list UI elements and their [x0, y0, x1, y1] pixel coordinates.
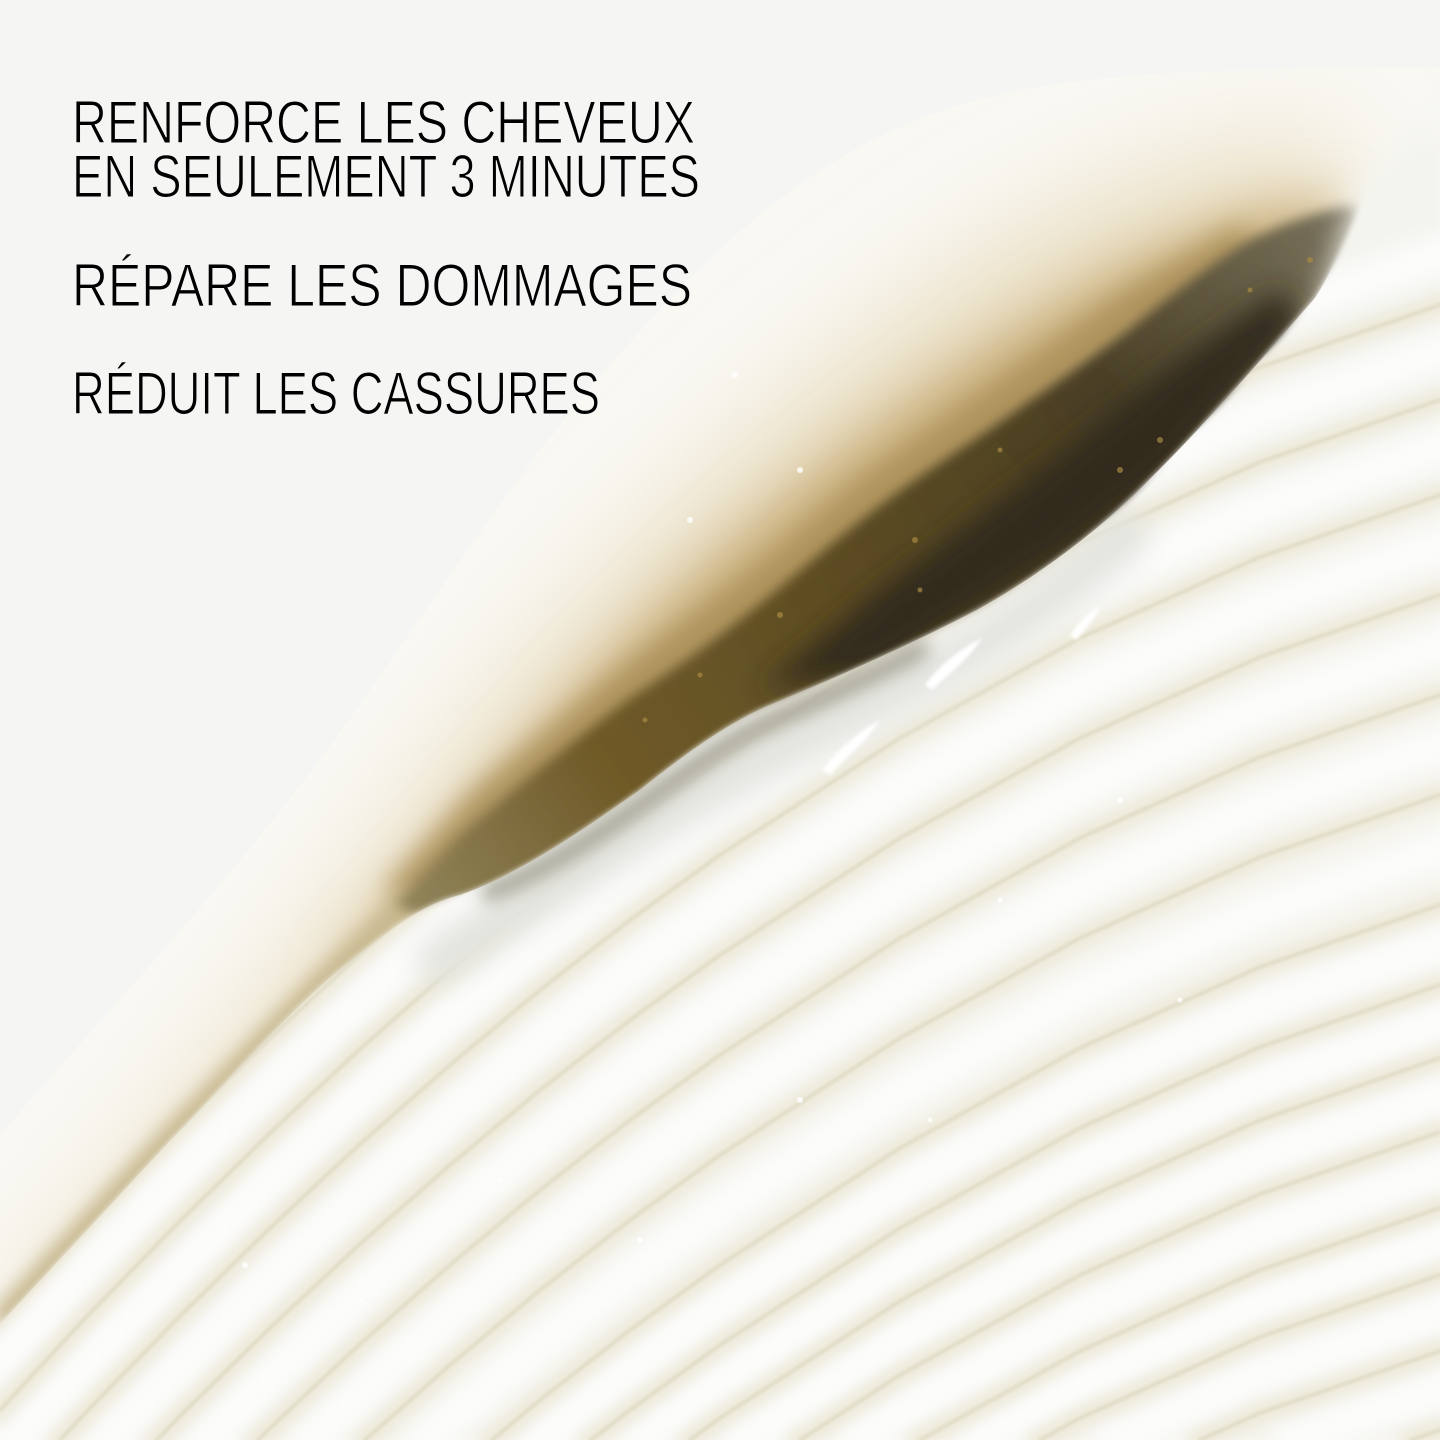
- grey edge under shadow: [490, 650, 920, 892]
- brown shadow band: [395, 206, 1358, 930]
- pale sheen below shadow: [440, 535, 1125, 960]
- tan glow above the shadow: [330, 200, 1340, 990]
- line: in just 3 minutes: EN SEULEMENT 3 MINUTES: [72, 143, 700, 210]
- ribbed cream base: [0, 210, 1362, 1333]
- groove lines: [0, 305, 1440, 1440]
- tan crease along left fold: [0, 900, 413, 1324]
- cream bubbles: [642, 257, 1313, 722]
- darkest shadow core: [760, 290, 1300, 690]
- soft whitening beside the shadow tip: [1294, 184, 1368, 318]
- glossy highlights: [822, 606, 1100, 775]
- line: strengthens hair: RENFORCE LES CHEVEUX: [72, 89, 695, 156]
- warm cream ridge shoulders: [0, 305, 1440, 1440]
- headline copy: [72, 89, 700, 427]
- deeper tan against the shadow: [400, 240, 1250, 900]
- line: repairs damage: RÉPARE LES DOMMAGES: [72, 252, 692, 319]
- line: reduces breakage: RÉDUIT LES CASSURES: [72, 360, 600, 427]
- wide warm glow on upper fold: [0, 140, 1340, 1350]
